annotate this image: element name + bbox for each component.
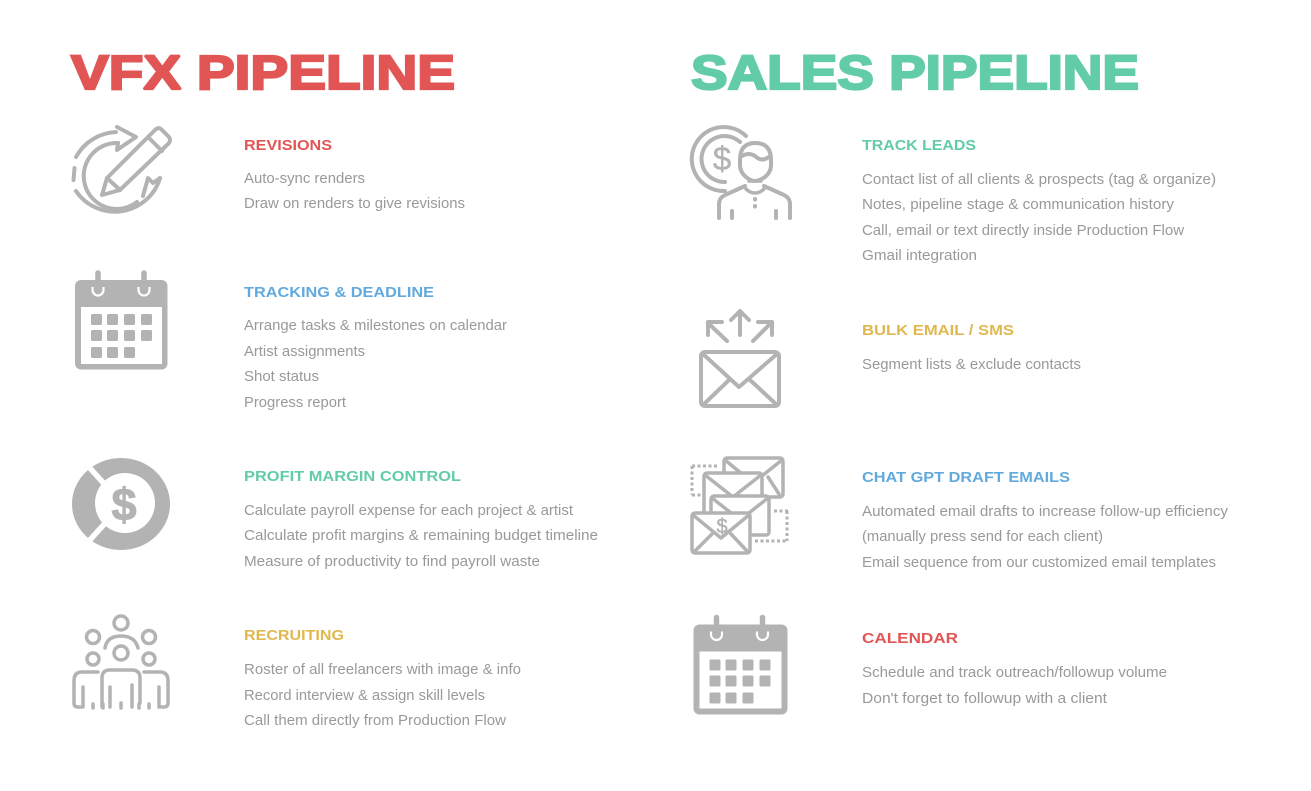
- icon: profit donut with dollar: [72, 455, 170, 553]
- text: profit details: Calculate payroll expense for each project & artist: [244, 502, 574, 519]
- text: tracking details: [244, 317, 507, 411]
- text: recruiting details: Record interview & assign skill levels: [244, 687, 485, 704]
- item: calendar: [862, 631, 1167, 707]
- text: bulk email details: Segment lists & exclude contacts: [862, 356, 1081, 373]
- text: tracking details: Shot status: [244, 368, 319, 385]
- item: recruiting: [244, 628, 521, 729]
- text: track leads details: [862, 171, 1216, 264]
- text: track leads details: Contact list of all clients & prospects (tag & organize): [862, 171, 1216, 188]
- text: revisions details: Draw on renders to give revisions: [244, 195, 465, 212]
- text: recruiting details: Roster of all freelancers with image & info: [244, 661, 521, 678]
- icon: envelope with outgoing arrows: [701, 311, 779, 406]
- text: track leads details: Notes, pipeline stage & communication history: [862, 196, 1175, 213]
- text: calendar details: Schedule and track outreach/followup volume: [862, 664, 1167, 681]
- icon: stack of draft emails: $: [716, 516, 728, 538]
- text: tracking details: Arrange tasks & milestones on calendar: [244, 317, 507, 334]
- text: calendar details: [862, 664, 1167, 707]
- heading: tracking and deadline: TRACKING & DEADLINE: [244, 285, 434, 301]
- text: calendar details: Don't forget to followup with a client: [862, 690, 1108, 707]
- item: tracking and deadline: [244, 285, 507, 411]
- text: recruiting details: [244, 661, 521, 729]
- title: Sales pipeline: SALES PIPELINE: [691, 47, 1139, 100]
- text: chat gpt details: Automated email drafts to increase follow-up efficiency: [862, 503, 1229, 520]
- icon: salesperson with coin: [692, 127, 790, 218]
- icon: sales calendar: [694, 618, 788, 714]
- icon: tracking calendar: [75, 273, 168, 370]
- icon: stack of draft emails: [692, 458, 789, 553]
- title: VFX pipeline: VFX PIPELINE: [71, 47, 455, 100]
- text: tracking details: Progress report: [244, 394, 347, 411]
- heading: revisions: REVISIONS: [244, 138, 332, 154]
- text: chat gpt details: Email sequence from our customized email templates: [862, 554, 1216, 571]
- text: revisions details: [244, 170, 465, 212]
- heading: chat gpt draft emails: CHAT GPT DRAFT EMAILS: [862, 470, 1070, 486]
- item: profit margin control: [244, 469, 598, 570]
- item: bulk email: [862, 323, 1081, 373]
- text: profit details: [244, 502, 598, 570]
- icon: salesperson with coin: $: [713, 140, 731, 177]
- text: chat gpt details: (manually press send for each client): [862, 528, 1103, 545]
- icon: profit donut with dollar: $: [111, 479, 137, 530]
- text: revisions details: Auto-sync renders: [244, 170, 365, 187]
- heading: recruiting: RECRUITING: [244, 628, 344, 644]
- icon: revisions pencil and circular arrows: [74, 127, 170, 212]
- text: chat gpt details: [862, 503, 1229, 571]
- text: profit details: Measure of productivity to find payroll waste: [244, 553, 540, 570]
- text: tracking details: Artist assignments: [244, 343, 365, 360]
- text: track leads details: Call, email or text directly inside Production Flow: [862, 222, 1184, 239]
- heading: track leads: TRACK LEADS: [862, 138, 976, 154]
- heading: calendar: CALENDAR: [862, 631, 959, 647]
- panel: Sales pipeline: [691, 47, 1229, 714]
- heading: profit margin control: PROFIT MARGIN CONTROL: [244, 469, 461, 485]
- item: chat gpt draft emails: [862, 470, 1229, 571]
- panel: VFX pipeline: [71, 47, 598, 729]
- text: recruiting details: Call them directly from Production Flow: [244, 712, 506, 729]
- icon: recruiting group of people: [74, 616, 168, 708]
- text: profit details: Calculate profit margins & remaining budget timeline: [244, 527, 598, 544]
- item: revisions: [244, 138, 465, 212]
- item: track leads: [862, 138, 1216, 264]
- heading: bulk email: BULK EMAIL / SMS: [862, 323, 1014, 339]
- text: track leads details: Gmail integration: [862, 247, 977, 264]
